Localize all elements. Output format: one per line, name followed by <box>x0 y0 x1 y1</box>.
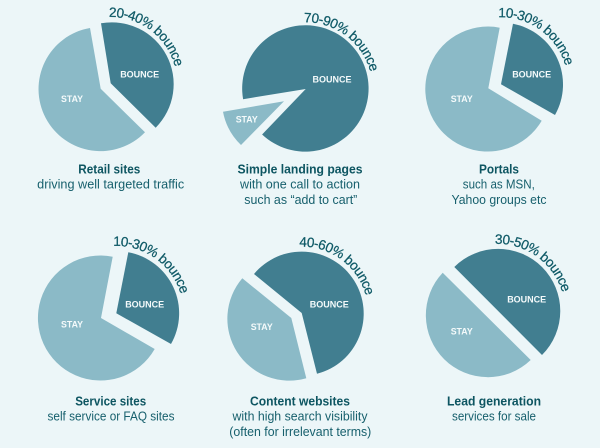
caption: such as MSN, <box>463 178 535 192</box>
stay slice <box>38 255 155 380</box>
panel: service sites <box>38 236 187 424</box>
caption: Portals <box>479 162 519 176</box>
stay slice label: STAY <box>236 114 258 125</box>
caption: Content websites <box>250 395 350 409</box>
bounce slice label: BOUNCE <box>125 299 164 310</box>
panel: content websites <box>227 237 372 439</box>
stay slice label: STAY <box>251 322 273 333</box>
panel: portals <box>425 8 572 207</box>
caption: Yahoo groups etc <box>452 193 546 207</box>
bounce slice label: BOUNCE <box>120 69 159 80</box>
caption: Lead generation <box>447 395 541 409</box>
caption: Retail sites <box>78 162 140 176</box>
caption <box>37 162 184 192</box>
stay slice <box>425 27 542 152</box>
bounce slice <box>242 25 369 152</box>
bounce slice <box>454 249 560 355</box>
bounce range label: 70-90% bounce <box>304 12 377 71</box>
caption <box>238 162 363 207</box>
bounce slice label: BOUNCE <box>312 74 352 85</box>
bounce slice <box>501 24 563 115</box>
bounce slice <box>101 22 174 128</box>
bounce slice label: BOUNCE <box>507 294 546 305</box>
caption: driving well targeted traffic <box>37 178 184 192</box>
caption: services for sale <box>452 410 536 424</box>
caption <box>48 395 174 424</box>
stay slice <box>39 28 145 151</box>
panel: retail sites <box>37 7 184 192</box>
stay slice label: STAY <box>451 94 473 105</box>
stay slice label: STAY <box>61 94 84 105</box>
caption: such as “add to cart” <box>244 193 357 207</box>
caption: self service or FAQ sites <box>48 410 174 424</box>
bounce slice <box>254 252 364 374</box>
stay slice <box>227 278 306 381</box>
stay slice <box>223 101 284 145</box>
stay slice <box>426 273 531 377</box>
caption <box>447 395 541 424</box>
bounce slice <box>116 252 179 344</box>
caption: with high search visibility <box>232 410 368 424</box>
bounce slice label: BOUNCE <box>512 69 551 80</box>
panel: lead generation <box>426 234 568 424</box>
caption <box>452 162 546 207</box>
stay slice label: STAY <box>451 327 473 338</box>
bounce range label: 30-50% bounce <box>495 234 568 292</box>
bounce range label: 20-40% bounce <box>109 7 182 66</box>
caption <box>229 395 371 439</box>
bounce range label: 10-30% bounce <box>114 236 187 294</box>
caption: with one call to action <box>239 178 360 192</box>
stay slice label: STAY <box>61 319 84 330</box>
bounce range label: 10-30% bounce <box>499 8 572 65</box>
panel: simple landing pages <box>223 12 377 207</box>
bounce range label: 40-60% bounce <box>299 237 372 295</box>
caption: Service sites <box>75 395 146 409</box>
bounce slice label: BOUNCE <box>310 299 349 310</box>
caption: (often for irrelevant terms) <box>229 425 371 439</box>
caption: Simple landing pages <box>238 162 363 176</box>
